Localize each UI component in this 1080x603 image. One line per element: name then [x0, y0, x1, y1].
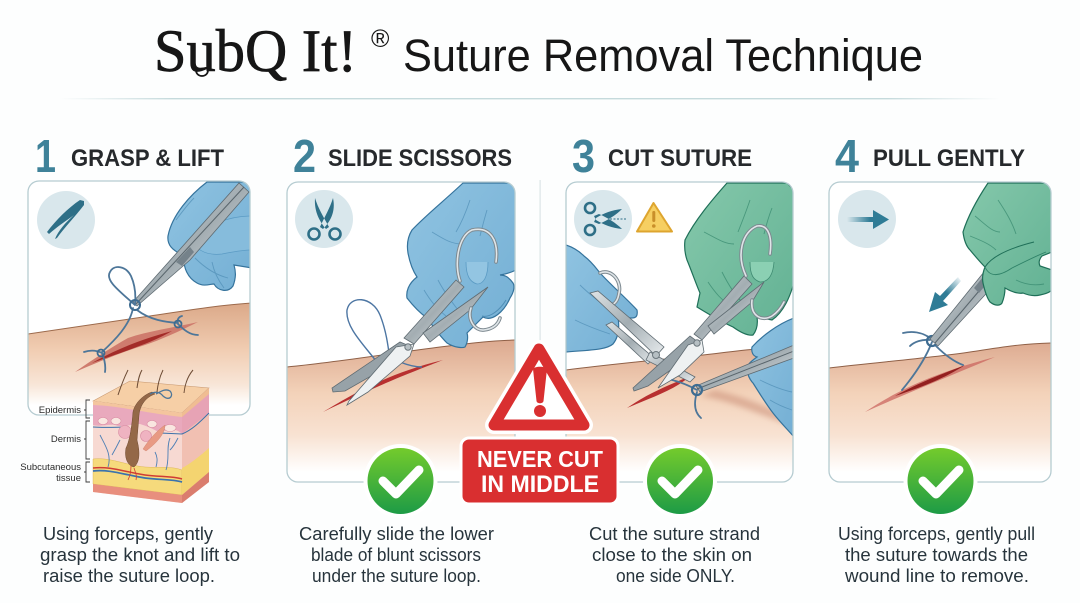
wound [323, 360, 443, 412]
skin anatomy block [20, 370, 209, 503]
gloved hand [963, 183, 1052, 305]
title [154, 18, 923, 84]
warning label: IN MIDDLE [481, 471, 599, 498]
right blue hand [747, 318, 794, 437]
gloved hand [168, 182, 252, 290]
step 1 heading [35, 130, 224, 182]
caption: step 1: grasp the knot and lift to [40, 545, 240, 565]
caption: step 1 [40, 524, 240, 586]
caption: step 2: blade of blunt scissors [311, 545, 481, 565]
step 3 heading: 3 [572, 130, 595, 182]
warning triangle [494, 349, 584, 425]
title: SubQ It! [154, 18, 357, 84]
step 4 heading: 4 [835, 130, 859, 182]
suture loop and knots [84, 267, 198, 372]
caption: step 2: Carefully slide the lower [299, 524, 494, 544]
main scissors [633, 226, 784, 391]
surface hairs [118, 370, 193, 395]
step 4 heading [835, 130, 1025, 182]
panel: step 3 cut suture [566, 182, 794, 482]
green check: step 4 [904, 444, 978, 518]
green check: step 2 [364, 444, 438, 518]
epidermis layer [93, 405, 182, 434]
step 1 heading: GRASP & LIFT [71, 145, 224, 172]
caption: step 3: Cut the suture strand [589, 524, 760, 544]
warning label: NEVER CUT [477, 446, 603, 472]
caption: step 4: Using forceps, gently pull [838, 524, 1035, 544]
skin surface [566, 350, 792, 466]
forceps [930, 273, 986, 346]
skin surface [28, 304, 250, 400]
right forceps [696, 345, 794, 392]
green hand [685, 183, 794, 335]
forceps [133, 183, 249, 306]
caption: step 4: the suture towards the [845, 545, 1028, 565]
wound [75, 322, 198, 372]
direction arrow [929, 277, 961, 312]
skin surface [288, 340, 514, 466]
caption: step 2 [299, 524, 494, 586]
icon: forceps [37, 191, 95, 249]
caption: step 4: wound line to remove. [844, 566, 1029, 586]
green check: step 3 [643, 444, 717, 518]
hair follicle [125, 392, 155, 467]
caption: step 1: Using forceps, gently [43, 524, 213, 544]
layer labels: Epidermis [39, 405, 81, 416]
sebaceous lobes and muscle [118, 425, 165, 451]
panel: step 2 slide scissors [287, 182, 516, 482]
step 3 heading [572, 130, 752, 182]
suture [902, 332, 963, 390]
layer labels: Dermis [51, 434, 81, 445]
suture and knot [672, 380, 702, 418]
icon: scissors cutting [574, 190, 632, 248]
blood vessels [93, 468, 182, 479]
left scissors [590, 272, 695, 382]
layer labels: Subcutaneous [20, 462, 81, 473]
step 3 heading: CUT SUTURE [608, 145, 752, 172]
caption: step 4 [838, 524, 1035, 586]
skin surface [830, 344, 1050, 466]
title: ® [371, 25, 390, 53]
icon: arrow [838, 190, 896, 248]
step 4 heading: PULL GENTLY [873, 145, 1025, 172]
icon: scissors [295, 190, 353, 248]
warning: never cut in middle [461, 349, 618, 504]
panel: step 4 pull gently [829, 182, 1052, 482]
wound [627, 379, 686, 408]
scissors [332, 229, 500, 405]
wound [865, 357, 995, 412]
gloved hand [407, 183, 516, 348]
layer labels [20, 400, 90, 484]
step 2 heading: 2 [293, 130, 316, 182]
step 2 heading: SLIDE SCISSORS [328, 145, 512, 172]
caption: step 1: raise the suture loop. [43, 566, 215, 586]
suture loop [347, 300, 422, 372]
warning label [461, 438, 618, 504]
caption: step 3: one side ONLY. [616, 566, 735, 586]
icon: yellow warning triangle [637, 203, 672, 232]
caption: step 3 [589, 524, 760, 586]
caption: step 3: close to the skin on [592, 545, 752, 565]
title: Suture Removal Technique [403, 30, 923, 81]
fat layer [93, 459, 182, 495]
layer labels: tissue [56, 473, 81, 484]
step 1 heading: 1 [35, 130, 56, 182]
panel: step 1 grasp and lift [28, 181, 252, 420]
step 2 heading [293, 130, 512, 182]
left blue hand [566, 245, 637, 352]
caption: step 2: under the suture loop. [312, 566, 481, 586]
